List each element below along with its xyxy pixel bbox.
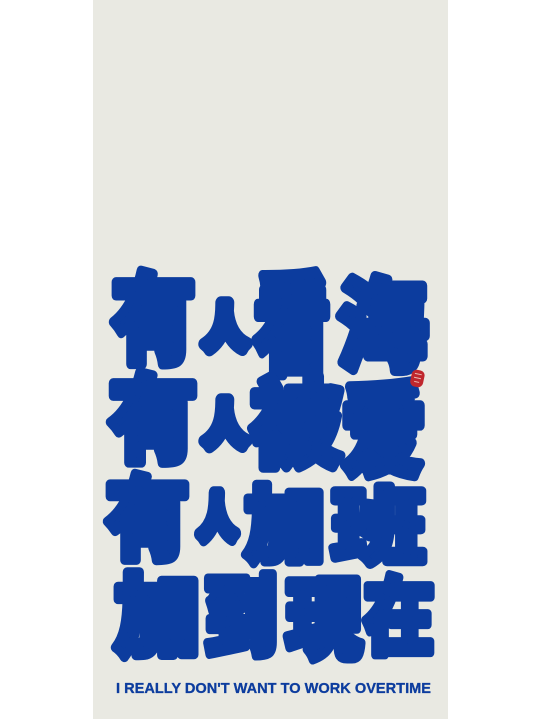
- line 1: 有人看海: 有: [112, 267, 195, 376]
- line 3: 有人加班: [106, 469, 425, 574]
- subtitle: I REALLY DON'T WANT TO WORK OVERTIME: [116, 681, 431, 697]
- line 1: 有人看海: 看: [254, 266, 330, 387]
- line 3: 有人加班: 加: [244, 478, 325, 574]
- line 3: 有人加班: 人: [198, 492, 237, 547]
- line 1: 有人看海: 人: [203, 301, 248, 357]
- line 4: 加到現在: 到: [204, 569, 277, 668]
- headline: four lines of calligraphy: [106, 266, 434, 670]
- line 4: 加到現在: 在: [364, 570, 434, 666]
- line 3: 有人加班: 班: [332, 481, 425, 574]
- icon: red seal: [409, 369, 426, 388]
- line 2: 有人被爱: 爱: [342, 375, 425, 488]
- line 2: 有人被爱: 被: [251, 371, 342, 479]
- line 1: 有人看海: 海: [337, 273, 427, 384]
- line 1: 有人看海: [112, 266, 427, 387]
- line 4: 加到現在: 加: [114, 566, 200, 668]
- line 3: 有人加班: 有: [106, 469, 189, 571]
- line 4: 加到現在: 現: [286, 573, 362, 670]
- line 4: 加到現在: [114, 566, 434, 670]
- background panel: [93, 0, 448, 719]
- line 2: 有人被爱: 有: [109, 368, 197, 474]
- line 2: 有人被爱: 人: [203, 398, 248, 454]
- line 2: 有人被爱: [109, 368, 425, 488]
